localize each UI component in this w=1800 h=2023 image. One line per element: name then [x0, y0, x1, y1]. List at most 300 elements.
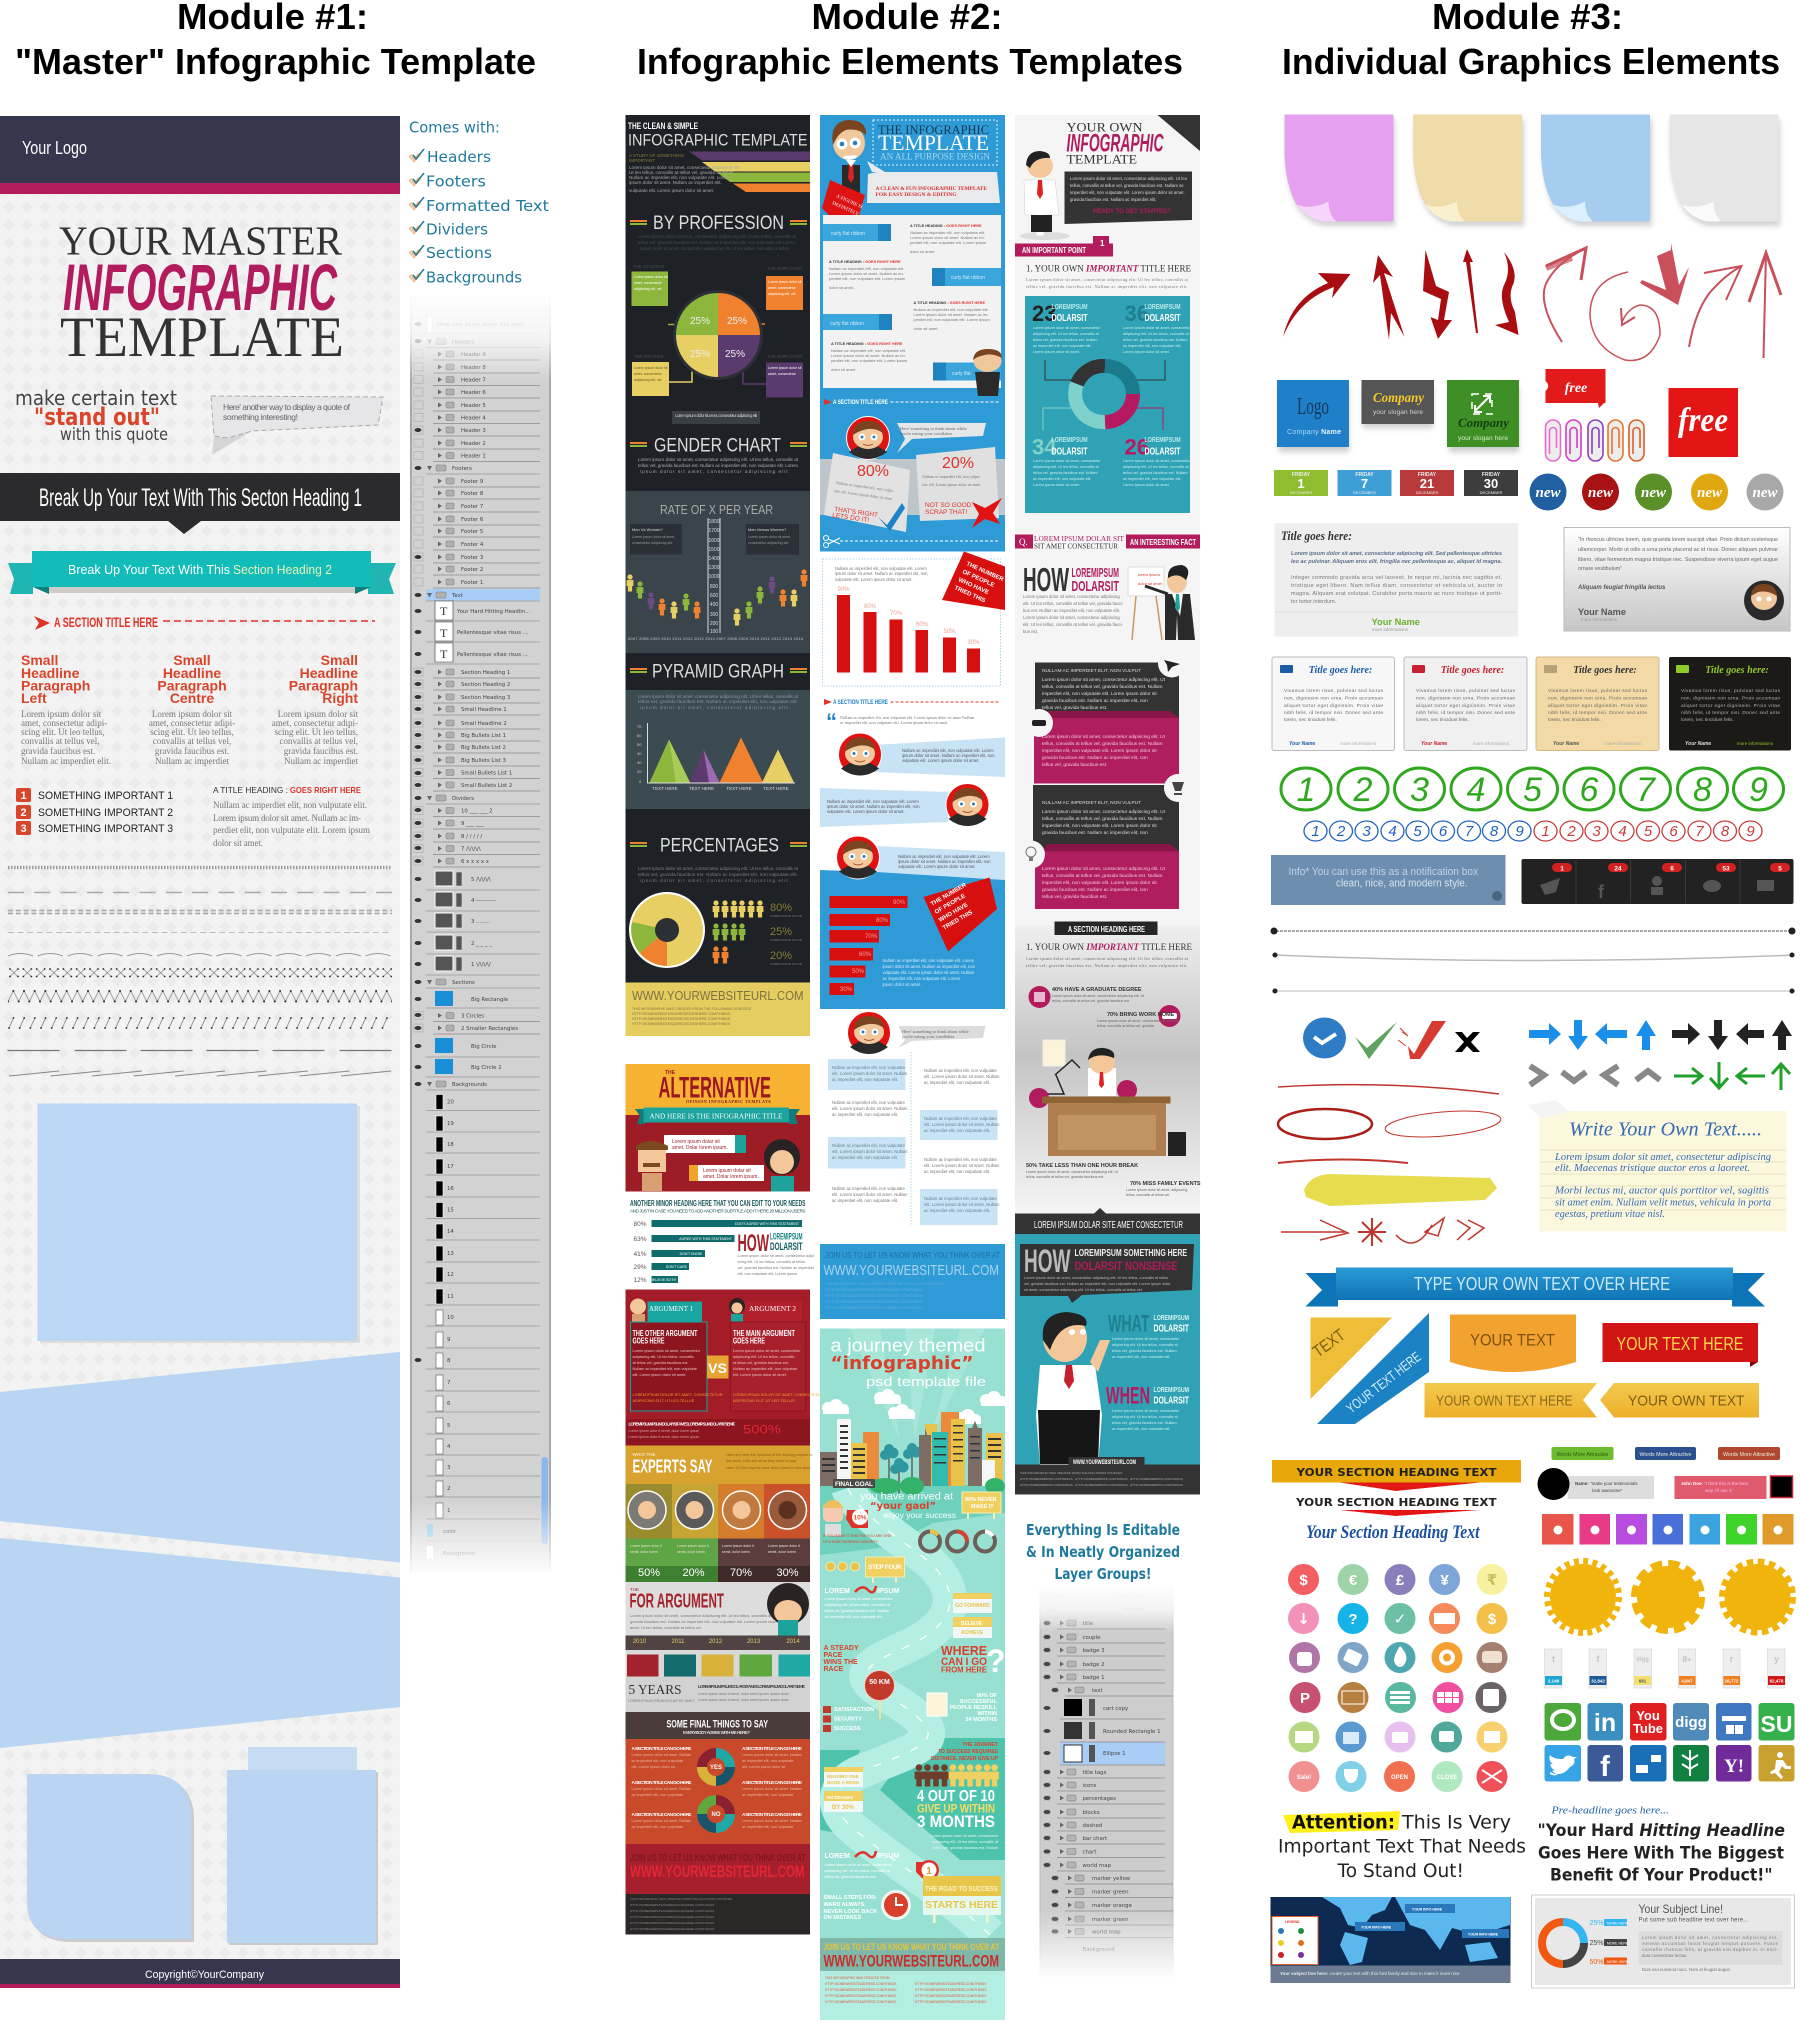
layers panel 1: Big Rectangle: [471, 997, 509, 1003]
pyramid graph section: 60: [637, 733, 642, 738]
four comment cards: more informations: [1737, 741, 1774, 746]
experts say section: WHAT THE: [632, 1452, 656, 1457]
layers panel 1: Pellentesque vitae risus ...: [457, 652, 528, 658]
alternative argument section: LOREM IPSUM DOLOR SIT AMET, CONSECTETUR: [733, 1393, 823, 1397]
layers panel 1: Section Heading 3: [461, 695, 510, 701]
teal donut panel: Lorem ipsum dolor sit amet, consectetur: [1123, 326, 1191, 330]
four out of ten statistic: TO SUCCESS REQUIRES: [938, 1749, 999, 1755]
alternative footer: JOIN US TO LET US KNOW WHAT YOU THINK OVER AT: [630, 1853, 806, 1864]
four comment cards: Your Name: [1553, 741, 1579, 747]
stacked info blocks with icons: gravida faucibus est. Nullam ac imperdiet elit, non: [1042, 698, 1148, 704]
teal how section: LOREMIPSUM: [1154, 1387, 1189, 1394]
layers panel 1: 12: [447, 1272, 454, 1278]
world map panel: [1270, 1897, 1510, 1983]
dark template footer: WWW.YOURWEBSITEURL.COM: [632, 988, 804, 1003]
alternative white bar section: BELIEVE BOTH: [651, 1278, 676, 1282]
alternative argument section: ARGUMENT 1: [649, 1305, 693, 1313]
teal how section: Lorem ipsum dolor sit amet, consectetur: [1112, 1409, 1180, 1413]
lower white quote section: Here' something to think about while: [902, 1029, 969, 1034]
where can i go text: FROM HERE: [941, 1666, 988, 1674]
character: large man pointing: [1036, 1312, 1110, 1466]
testimonial box left: tristique eget libero. Nam tellus diam, consectetur et vehicula ut, auctor in: [1291, 583, 1502, 589]
attention text: To Stand Out!: [1337, 1860, 1464, 1882]
percentages section: ipsum dolor sit amet, consectetur adipiscing elit.: [640, 878, 790, 883]
lower white quote section: elit. Lorem ipsum dolor sit amet. Nullam: [832, 1192, 908, 1197]
rate per year chart: RATE OF X PER YEAR: [660, 502, 773, 517]
alternative argument section: at tellus vel, gravida faucibus est.: [733, 1361, 789, 1365]
section heading 2 ribbon: [8, 551, 396, 594]
white bar chart section: ipsum dolor sit amet. Nullam ac imperdiet elit, non: [835, 571, 928, 576]
dark intro box: tellus, convallis at tellus vel, gravida faucibus est. Nullam ac: [1070, 183, 1185, 188]
hard hitting headline: Pre-headline goes here...: [1550, 1804, 1669, 1816]
alternative red hero: AND HERE IS THE INFOGRAPHIC TITLE: [650, 1112, 782, 1120]
layers panel 1: 1: [447, 1508, 450, 1514]
blue and red circled numbers: 8: [1490, 823, 1499, 840]
dashed speech bubble quote: something interesting!: [223, 412, 298, 422]
experts say section: Here 20,000 experts have been joined in this spirit: [726, 1466, 811, 1470]
layers panel 1: Headers: [452, 340, 475, 346]
important point tab: 1: [1100, 239, 1105, 248]
teal donut panel: LOREMIPSUM: [1052, 302, 1088, 311]
flat round icons grid: P: [1300, 1690, 1310, 1707]
ratings notes: NOT SO GOOD: [925, 502, 972, 509]
red text button: [1602, 1323, 1758, 1367]
green circled numbers: 9: [1749, 771, 1768, 809]
rate per year chart: 1800: [708, 519, 720, 525]
layers panel 1: Footer 9: [461, 479, 484, 485]
three small headline columns: Nullam ac imperdiet: [284, 756, 358, 766]
layers panel 1: Footers: [452, 466, 472, 472]
experts say section: semit, dolor lorem: [768, 1550, 796, 1554]
numbered important list: 2: [20, 807, 27, 819]
report card with donut chart: Duis sed euismod nunc. Nam id feugiat augue.: [1642, 1967, 1731, 1972]
teal donut panel: 26: [1124, 434, 1149, 460]
step signs and lorem: BELIEVE: [961, 1621, 983, 1627]
white bar chart section: vulputate elit. Lorem ipsum dolor sit amet.: [898, 864, 976, 869]
three small headline columns: scing elit. Ut leo tellus,: [21, 727, 104, 737]
ratings notes: tate elit. Lorem ipsum dolor sit amet: [922, 482, 981, 487]
white bar chart section: 30%: [967, 640, 980, 646]
gray office section: tellus, convallis at tellus vel, gravida faucibus est.: [1052, 999, 1130, 1003]
blue and red circled numbers: 7: [1465, 823, 1474, 840]
layers panel 1: 4 ----------: [471, 898, 496, 904]
alternative argument section: GOES HERE: [733, 1336, 765, 1346]
pie chart with callouts: adipiscing elit. vel: [634, 287, 662, 291]
title heading paragraph: A TITLE HEADING :: [213, 785, 288, 795]
module 1 heading: [15, 0, 536, 82]
for argument section: 2011: [672, 1639, 685, 1645]
percentages section: 20%: [770, 950, 792, 962]
four out of ten statistic: 3 MONTHS: [917, 1812, 995, 1831]
rate per year chart: Men Versus Women?: [748, 527, 787, 532]
blue and red circled numbers: 9: [1515, 823, 1524, 840]
new seals: new: [1535, 485, 1561, 501]
world map panel: YOUR INFO HERE: [1361, 1926, 1392, 1930]
rounded shape placeholder: [27, 1774, 194, 1942]
lower white quote section: Nullam ac imperdiet elit, non vulputate: [924, 1068, 997, 1073]
gold corner ribbon: [1309, 1318, 1392, 1399]
layers panel 2: Normal: [1050, 1594, 1065, 1599]
four out of ten statistic: BOOK A WEEK: [827, 1780, 860, 1785]
white bar chart section: 80%: [864, 604, 877, 610]
panel: your own infographic template: [1015, 115, 1201, 1494]
dark template footer: HTTP://SOMEWEBSITEADDRESSGOESHERE.COM/THINGS: [632, 1012, 731, 1016]
teal donut panel: tellus vel, gravida faucibus est. Nullam: [1033, 338, 1098, 342]
layers panel 1: Background: [443, 1551, 475, 1557]
white content panel with curly ribbons: curly flat: [952, 371, 971, 377]
for argument section: Lorem ipsum dolor it semit, dolor lorem ipsum, ipsum dolor: [698, 1698, 790, 1702]
lower white quote section: elit. Lorem ipsum dolor sit amet. Nullam: [832, 1071, 908, 1076]
road to success sign: 1: [926, 1866, 932, 1877]
main title: TEMPLATE: [60, 306, 344, 369]
testimonial box right: Your Name: [1578, 607, 1626, 617]
alternative red hero: [626, 1108, 810, 1192]
layers panel 1: 13: [447, 1251, 454, 1257]
alternative argument section: Nullam ac imperdiet elit, non vulputate: [733, 1367, 797, 1371]
teal donut panel: tellus vel, gravida faucibus est. Nullam: [1123, 338, 1188, 342]
alternative white bar section: LOREMIPSUM: [770, 1232, 802, 1242]
alternative white bar section: 41%: [634, 1251, 647, 1258]
experts say section: semit, dolor lorem: [722, 1550, 750, 1554]
stacked info blocks with icons: imperdiet elit, non vulputate elit. Lorem ipsum dolor sit: [1042, 880, 1157, 886]
white content panel with curly ribbons: curly flat ribbon: [951, 275, 985, 281]
large social tiles: You: [1636, 1708, 1660, 1723]
green circled numbers: 3: [1410, 771, 1429, 809]
teal donut panel: ac imperdiet elit, non vulputate elit.: [1033, 477, 1091, 481]
blue horizontal bars section: 90%: [893, 900, 906, 906]
pyramid graph section: Lorem ipsum dolor sit amet, consectetur adipiscing elit. Ut leo tellus, convallis at: [638, 694, 799, 699]
colored stripes: Nullam ac imperdiet elit, non vulputate elit. Lorem: [629, 175, 730, 180]
white content panel with curly ribbons: A TITLE HEADING : GOES RIGHT HERE: [829, 260, 901, 264]
fabric logo badges: your slogan here: [1373, 409, 1423, 416]
white bar chart section: A SECTION TITLE HERE: [833, 700, 888, 706]
template title: YOUR OWN: [1066, 120, 1143, 134]
new seals: [1530, 474, 1784, 510]
three small headline columns: Right: [322, 690, 358, 706]
experts say section: Lorem ipsum dolor it: [677, 1544, 709, 1548]
pyramid graph section: 20: [637, 769, 642, 774]
journey footer: HTTP://SOMEWEBSITEADDRESS.COM/THINGS: [915, 1988, 986, 1992]
colored icon tags: [1542, 1514, 1794, 1544]
final things section: Lorem ipsum dolor sit amet. Nullam: [632, 1753, 691, 1757]
teal how section: sit amet, consectetur adipiscing elit. Ut leo tellus, convallis at tellus vel.: [1024, 1288, 1143, 1292]
alternative white bar section: 12%: [634, 1277, 647, 1284]
flat round icons grid: ↓: [1297, 1610, 1310, 1628]
goal text and sign: you have arrived at: [860, 1492, 953, 1502]
testimonial strips: look awesome": [1592, 1488, 1623, 1493]
final things section: YES: [710, 1765, 722, 1771]
large social tiles: digg: [1675, 1714, 1707, 1731]
blue horizontal bars section: ac imperdiet elit, non vulputate elit. Lorem: [882, 976, 961, 981]
slanted band placeholder 2: [0, 1538, 400, 1748]
gray office section: tellus, convallis at tellus vel, gravida faucibus est.: [1026, 1175, 1104, 1179]
white content panel with curly ribbons: curly flat ribbon: [830, 321, 864, 327]
three small headline columns: Small: [321, 652, 358, 668]
final things section: A SECTION TITLE CAN GO HERE: [632, 1812, 692, 1818]
percentages section: Lorem ipsum dolor sit amet, consectetur adipiscing elit. Ut leo tellus, convallis at: [638, 866, 799, 871]
layers panel 2: marker green: [1092, 1890, 1129, 1896]
handwritten note paper: [1528, 1100, 1786, 1232]
alternative argument section: GOES HERE: [632, 1336, 665, 1346]
white content panel with curly ribbons: Nullam ac imperdiet elit, non vulputate elit.: [910, 230, 985, 235]
gold ribbon left: YOUR OWN TEXT HERE: [1436, 1392, 1572, 1410]
layers panel 1: 19: [447, 1121, 454, 1127]
four comment cards: aliquet tortor eget dignissim. Proin vitae: [1416, 703, 1515, 709]
white content panel with curly ribbons: dolor sit amet.: [914, 326, 939, 331]
step signs and lorem: tellus vel, gravida faucibus est. Nullam: [824, 1609, 889, 1613]
white bar chart section: WHO HAVE: [957, 577, 989, 596]
for argument section: gravida faucibus est. Nullam ac imperdiet elit, non vulputate elit. Lorem ipsum dolor sit: [630, 1619, 783, 1624]
dark template title: INFOGRAPHIC TEMPLATE: [628, 130, 808, 150]
experts say section: Here are here the opinions of the leading experts in: [726, 1453, 812, 1457]
road to success sign: IPSUM: [877, 1853, 899, 1860]
step signs and lorem: GO FORWARD: [955, 1603, 990, 1609]
gray office section: tellus vel, gravida faucibus est. Nullam ac imperdiet elit, non vulputate elit.: [1026, 963, 1188, 969]
gender chart heading: [630, 436, 807, 474]
comes with checklist: Footers: [426, 172, 486, 190]
final things section: Lorem ipsum dolor sit amet. Nullam: [632, 1787, 691, 1791]
blue horizontal bars section: OF PEOPLE: [934, 893, 967, 916]
for argument section: THE: [630, 1587, 639, 1592]
layers panel 1: Pellentesque vitae risus ...: [457, 630, 528, 636]
how lorem text block: [1023, 561, 1124, 634]
social count bar: 24: [1614, 866, 1622, 872]
step signs and lorem: Lorem ipsum dolor sit amet, consectetur: [824, 1597, 893, 1601]
pie chart with callouts: Lorem ipsum dolor sit: [634, 275, 667, 279]
where can i go text: WHERE: [941, 1643, 987, 1658]
alternative white bar section: scing elit. Ut leo tellus, convallis at tellus: [738, 1260, 805, 1264]
alternative argument section: elit. Lorem ipsum dolor sit amet.: [733, 1373, 787, 1377]
three small headline columns: Headline: [163, 665, 221, 681]
divider samples: [8, 868, 392, 1076]
small social counters: 62,478: [1770, 1678, 1784, 1684]
four out of ten statistic: [824, 1742, 999, 1850]
handwritten note paper: egestas, pretium vitae nisl.: [1555, 1209, 1665, 1220]
white content panel with curly ribbons: Nullam ac imperdiet elit, non vulputate elit.: [914, 307, 989, 312]
blue and red circled numbers: 5: [1413, 823, 1422, 840]
blue and red circled numbers: 5: [1644, 823, 1653, 840]
dark template footer: [626, 982, 810, 1036]
final things section: A SECTION TITLE CAN GO HERE: [742, 1746, 803, 1752]
teal donut panel: Lorem ipsum dolor sit amet.: [1033, 483, 1080, 487]
teal donut panel: DOLARSIT: [1144, 313, 1180, 324]
white bar chart section: “: [826, 709, 837, 734]
four out of ten statistic: DISTANCE, NEVER GIVE UP: [931, 1756, 999, 1762]
steady pace text and distance sign: 50 KM: [869, 1679, 890, 1686]
experts say section: [626, 1446, 812, 1582]
final things section: A SECTION TITLE CAN GO HERE: [742, 1812, 803, 1818]
report card with donut chart: [1532, 1895, 1794, 1988]
fabric logo badges: your slogan here: [1458, 435, 1508, 442]
teal donut panel: ac imperdiet elit, non vulputate elit.: [1033, 344, 1091, 348]
four comment cards: [1272, 657, 1791, 750]
important point tab: AN IMPORTANT POINT: [1022, 246, 1086, 255]
large free stamp: free: [1678, 402, 1728, 439]
alternative argument section: ARGUMENT 2: [749, 1305, 797, 1313]
rate per year chart: 1600: [708, 538, 720, 544]
white bar chart section: THE NUMBER: [965, 561, 1005, 583]
lower white quote section: elit. Lorem ipsum dolor sit amet. Nullam: [924, 1163, 1000, 1168]
highlighted text layer group: [426, 589, 540, 601]
layers panel 1: color: [443, 1529, 457, 1535]
ratings notes: 20%: [942, 455, 974, 472]
world map panel: YOUR INFO HERE: [1412, 1908, 1443, 1912]
layers panel 1: 6: [447, 1401, 451, 1407]
green circled numbers: 2: [1353, 771, 1373, 809]
comes with checklist: Dividers: [426, 220, 488, 238]
four comment cards: non, dignissim non urna. Proin accumsan: [1416, 696, 1515, 702]
report card with donut chart: 50%: [1590, 1959, 1604, 1966]
stacked info blocks with icons: Lorem ipsum dolor sit amet, consectetur adipiscing elit. Ut: [1042, 809, 1166, 815]
layers panel 1: Small Bullets List 1: [461, 770, 512, 776]
alternative white bar section: Lorem ipsum dolor sit amet, consectetur adipi: [738, 1254, 814, 1258]
how lorem text block: bus est. Nullam ac imperdiet elit, non vulputate elit.: [1023, 608, 1120, 613]
alternative white bar section: ANOTHER MINOR HEADING HERE THAT YOU CAN EDIT TO YOUR NEEDS: [630, 1199, 806, 1208]
template title: TEMPLATE: [1066, 152, 1137, 166]
how lorem text block: bus est.: [1023, 629, 1038, 634]
alternative white bar section: DOLARSIT: [770, 1241, 803, 1253]
three small headline columns: Lorem ipsum dolor sit: [278, 709, 358, 719]
date tags: DECEMBER: [1416, 490, 1438, 495]
teal how section: LOREMIPSUM: [1154, 1315, 1189, 1322]
large social tiles: Y!: [1724, 1756, 1744, 1777]
road to success sign: NEVER LOOK BACK: [824, 1909, 877, 1915]
scissors cut line: [824, 536, 1000, 548]
green circled numbers: 5: [1523, 771, 1542, 809]
where can i go text: SUCCESSFUL: [960, 1699, 998, 1705]
stacked info blocks with icons: NULLAM AC IMPERDIET ELIT, NON VULPUT: [1042, 668, 1141, 674]
rate per year chart: 400: [710, 602, 718, 608]
white content panel with curly ribbons: [823, 215, 1002, 396]
panel: dark by-profession template: [626, 115, 810, 1036]
alternative footer: HTTP://SOMEWEBSITEADDRESSGOESHERE.COM/THINGS: [630, 1927, 714, 1931]
small word tags: Words More Attractive: [1723, 1452, 1775, 1458]
testimonial box left: Integer commodo gravida arcu vel laoreet. In neque mi, lacinia nec sagittis et,: [1291, 575, 1502, 581]
blue and red circled numbers: 4: [1618, 823, 1627, 840]
percentages section: LOREM IPSUM DOLAR: [770, 938, 803, 942]
for argument section: [626, 1582, 810, 1712]
how lorem text block: HOW: [1023, 561, 1069, 598]
road to success sign: tellus vel, gravida faucibus est.: [824, 1875, 876, 1879]
social count bar: 6: [1670, 866, 1674, 872]
percentages section: [626, 809, 810, 982]
comes with checklist: Formatted Text: [426, 197, 549, 215]
testimonial box left: [1274, 523, 1518, 636]
for argument section: 2014: [786, 1639, 800, 1645]
for argument section: Lorem ipsum dolor it semit, dolor lorem ipsum, ipsum dolor: [698, 1692, 790, 1696]
layers panel 1: 18: [447, 1142, 454, 1148]
interesting fact row: LOREM IPSUM DOLAR SIT: [1034, 535, 1125, 543]
blue horizontal bars section: vulputate elit. Lorem ipsum dolor sit amet. Nullam: [882, 970, 975, 975]
blue horizontal bars section: WHO HAVE: [938, 902, 969, 924]
numbered important list: SOMETHING IMPORTANT 3: [38, 823, 173, 835]
blue and red circled numbers: 9: [1746, 823, 1755, 840]
layers panel 1: 10 ___ ___ 2: [461, 808, 493, 814]
rate per year chart: [626, 491, 810, 653]
module 2 heading: [637, 0, 1183, 82]
rate per year chart: consectetur adipiscing elit.: [632, 541, 673, 545]
blue template title: THE INFOGRAPHIC: [878, 122, 989, 137]
pyramid graph section: 0: [639, 779, 642, 784]
experts say section: 70%: [730, 1567, 752, 1579]
social count bar: 1: [1560, 866, 1564, 872]
green circled numbers: 7: [1636, 771, 1656, 809]
clean and fun speech ribbon: A CLEAN & FUN INFOGRAPHIC TEMPLATE: [876, 186, 987, 192]
where can i go text: 80% OF: [977, 1693, 998, 1699]
layers panel 1: 7: [447, 1380, 450, 1386]
flat round icons grid: Sale!: [1297, 1775, 1311, 1781]
testimonial box right: libero, vitae fermentum magna tristique nec. Suspendisse viverra ipsum eget augue: [1578, 557, 1778, 563]
lower white quote section: Nullam ac imperdiet elit, non vulputate: [832, 1065, 905, 1070]
pyramid graph section: 70: [637, 724, 642, 729]
highlighted ellipse layer: [1060, 1742, 1165, 1765]
green circled numbers: 4: [1467, 771, 1485, 809]
small word tags: [1552, 1447, 1780, 1460]
three small headline columns: Small: [173, 652, 211, 668]
journey footer: HTTP://SOMEWEBSITEADDRESS.COM/THINGS: [825, 1982, 896, 1986]
how lorem text block: DOLARSIT: [1072, 578, 1119, 595]
alternative 500 percent strip: 500%: [743, 1422, 781, 1436]
layers panel 2: chart: [1082, 1850, 1097, 1856]
world map panel: Your subject line here: create your text with this font family and size to make it more nice: [1280, 1971, 1460, 1976]
colored stripes: [629, 152, 810, 193]
stand out quote: make certain text: [15, 386, 177, 410]
alternative argument section: LOREM IPSUM DOLOR SIT AMET, CONSECTETUR: [632, 1393, 723, 1397]
title heading paragraph: [213, 785, 370, 848]
rate per year chart: 100: [710, 629, 718, 635]
red note: [822, 180, 865, 227]
layers panel 1: 2 _ _ _ _: [471, 941, 492, 947]
layers panel 1: Your Hard Hitting Headlin...: [456, 609, 531, 615]
flat round icons grid: ✓: [1394, 1610, 1406, 1628]
blue horizontal bars section: 60%: [859, 952, 872, 958]
title heading paragraph: GOES RIGHT HERE: [290, 785, 361, 795]
dark intro box: Lorem ipsum dolor sit amet, consectetur adipiscing elit. Ut leo: [1070, 176, 1188, 181]
four comment cards: more informations: [1605, 741, 1642, 746]
blue and red circled numbers: 4: [1388, 823, 1397, 840]
four comment cards: Title goes here:: [1309, 665, 1372, 676]
pyramid graph section: TEXT HERE: [763, 786, 789, 791]
alternative argument section: ADIPISCING ELIT. UT LEO TELLUS: [733, 1399, 795, 1403]
three small headline columns: Nullam ac imperdiet elit.: [21, 756, 111, 766]
layers panel 1: 7 /\/\/\/\: [461, 846, 481, 852]
alternative white bar section: AGREE WITH THIS STATEMENT: [679, 1237, 733, 1241]
experts say section: semit, dolor lorem: [630, 1550, 658, 1554]
step signs and lorem: adipiscing elit. Ut leo tellus, convallis at: [824, 1603, 891, 1607]
layers panel 1: Footer 7: [461, 504, 483, 510]
road to success sign: ON MISTAKES: [824, 1915, 862, 1921]
pyramid graph section: 50: [637, 742, 642, 747]
lower white quote section: ac imperdiet elit, non vulputate elit.: [924, 1169, 990, 1174]
three small headline columns: amet, consectetur adipi-: [272, 718, 358, 728]
white bar chart section: ipsum dolor sit amet. Nullam ac imperdiet elit, non: [827, 804, 920, 809]
layers panel 1: Small Headline 2: [461, 721, 507, 727]
report card with donut chart: 25%: [1590, 1940, 1604, 1947]
layers panel 1: 5 /\/\/\/\: [471, 877, 491, 883]
teal donut panel: adipiscing elit. Ut leo tellus, convallis at: [1123, 332, 1190, 336]
stacked info blocks with icons: gravida faucibus est. Nullam ac imperdiet elit, non: [1042, 830, 1148, 836]
layers panel 1: Header 9: [461, 352, 486, 358]
teal donut panel: Lorem ipsum dolor sit amet.: [1033, 350, 1080, 354]
pyramid graph section: TEXT HERE: [652, 786, 678, 791]
blue and black arrow icons: [1529, 1020, 1792, 1050]
layers panel 1: 2 Smaller Rectangles: [461, 1026, 518, 1032]
handwritten note paper: Lorem ipsum dolor sit amet, consectetur adipiscing: [1554, 1152, 1771, 1163]
city skyline: [820, 1389, 1007, 1495]
section title with arrow and dashes: A SECTION TITLE HERE: [54, 614, 158, 630]
four comment cards: Vivamus lorem risus, pulvinar sed luctus: [1284, 688, 1384, 694]
white bar chart section: OF PEOPLE: [961, 569, 995, 589]
